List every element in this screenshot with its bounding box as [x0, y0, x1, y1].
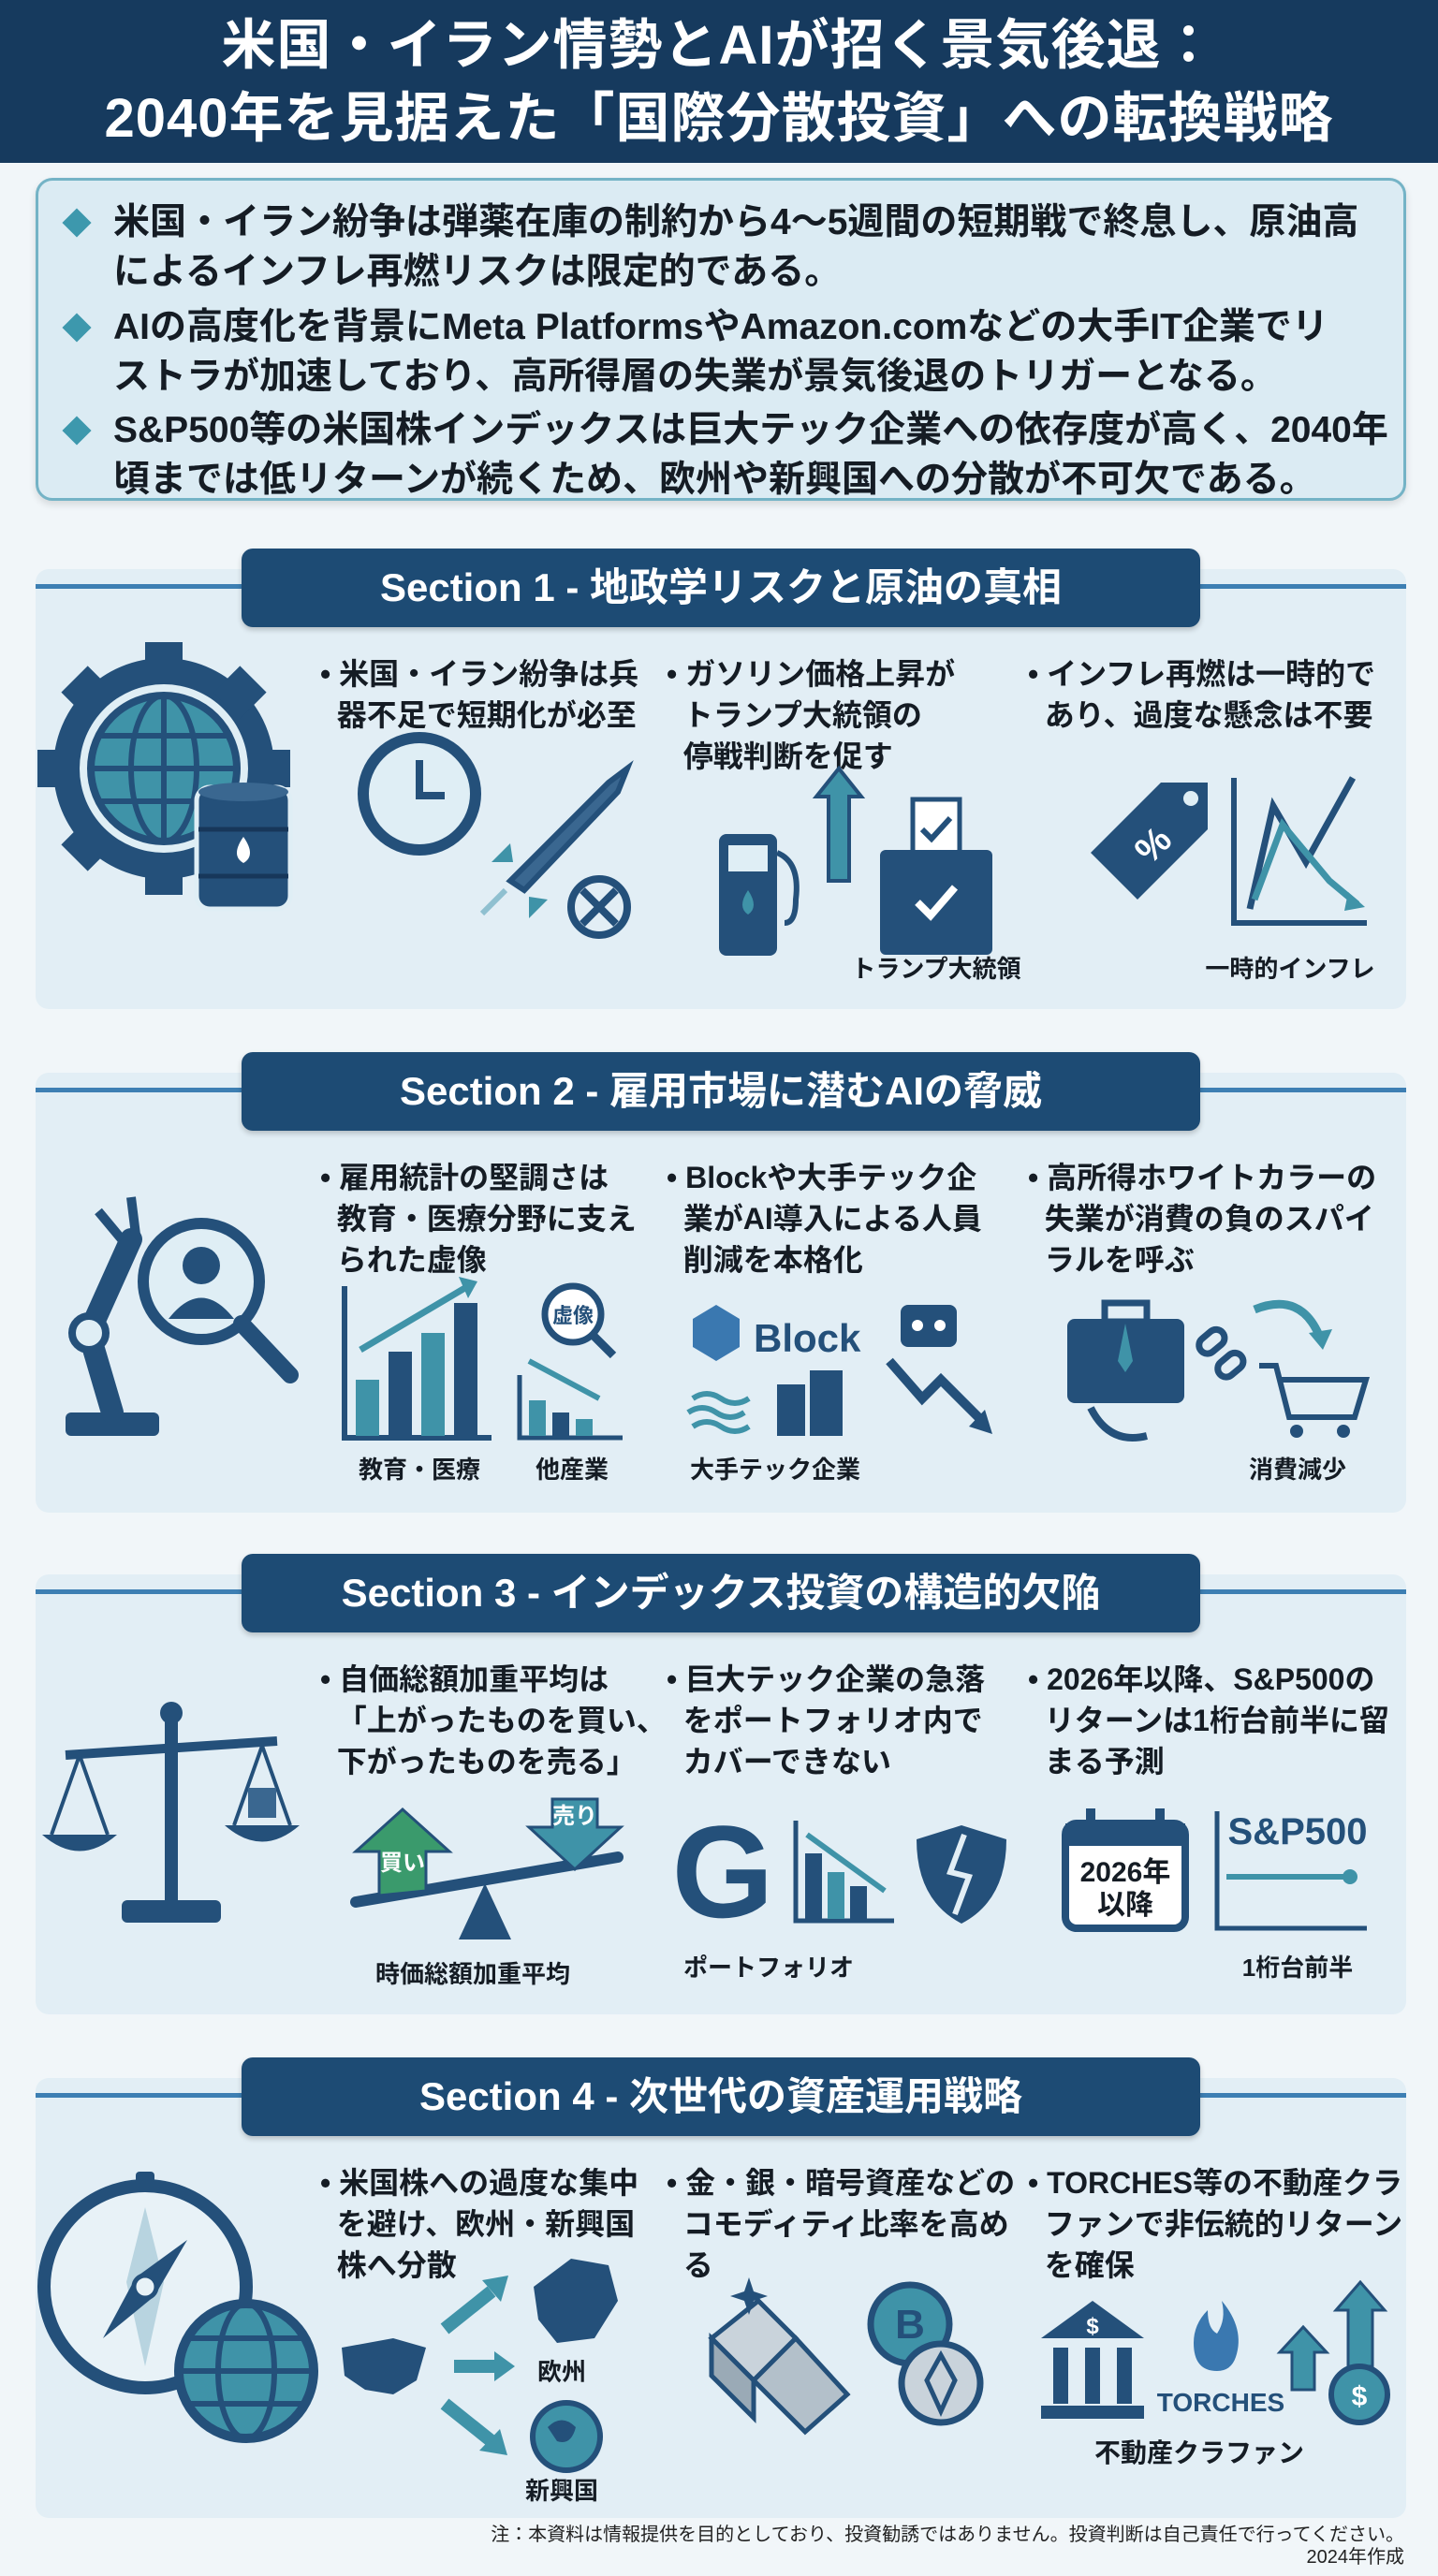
section 3: [36, 1554, 1406, 2014]
s2 bullet 2: • Blockや大手テック企: [667, 1161, 976, 1194]
s4 bullet 2: コモディティ比率を高め: [683, 2207, 1009, 2241]
footer note: [491, 2525, 1404, 2568]
icon: briefcase broken chain cart: [1067, 1303, 1366, 1484]
chart: employment bars: 教育・医療: [359, 1456, 480, 1484]
summary point 2: ストラが加速しており、高所得層の失業が景気後退のトリガーとなる。: [113, 357, 1277, 397]
s1 bullet 1: • 米国・イラン紛争は兵: [320, 657, 638, 691]
section 4 heading: Section 4 - 次世代の資産運用戦略: [419, 2074, 1022, 2118]
s3 bullet 2: をポートフォリオ内で: [683, 1704, 983, 1737]
icon: Block logo, tech firms, robot: 大手テック企業: [690, 1456, 860, 1484]
s3 bullet 2: カバーできない: [683, 1745, 891, 1778]
title header: 2040年を見据えた「国際分散投資」への転換戦略: [104, 88, 1334, 149]
s3 bullet 1: [320, 1662, 667, 1778]
s4 bullet 3: を確保: [1045, 2248, 1135, 2282]
chart: employment bars: 虚像: [552, 1304, 594, 1327]
s3 bullet 3: リターンは1桁台前半に留: [1045, 1704, 1389, 1737]
summary point 2: AIの高度化を背景にMeta PlatformsやAmazon.comなどの大手IT企業でリ: [113, 307, 1328, 347]
icon: seesaw buy sell: 時価総額加重平均: [375, 1960, 570, 1988]
s3 bullet 1: 「上がったものを買い、: [337, 1704, 667, 1737]
section 2: [36, 1052, 1406, 1513]
icon: seesaw buy sell: 買い: [380, 1851, 425, 1876]
s4 bullet 1: 株へ分散: [337, 2248, 457, 2282]
icon: price tag and inflation chart: %: [1127, 819, 1180, 871]
icon: calendar and S&P500 chart: 2026年: [1080, 1857, 1170, 1888]
icon: briefcase broken chain cart: 消費減少: [1249, 1456, 1346, 1484]
s3 bullet 3: [1028, 1662, 1389, 1778]
icon: calendar and S&P500 chart: 以降: [1097, 1890, 1153, 1921]
icon: Block logo, tech firms, robot: [688, 1305, 992, 1484]
icon: calendar and S&P500 chart: [1065, 1808, 1367, 1982]
icon: compass and globe: [44, 2172, 314, 2438]
s3 bullet 2: [667, 1662, 985, 1778]
s3 bullet 1: • 自価総額加重平均は: [320, 1662, 609, 1696]
icon: bank TORCHES arrows: 不動産クラファン: [1094, 2438, 1304, 2467]
section 1 heading: Section 1 - 地政学リスクと原油の真相: [380, 565, 1062, 609]
s4 bullet 1: を避け、欧州・新興国: [337, 2207, 635, 2241]
s4 bullet 3: [1028, 2166, 1402, 2282]
icon: bank TORCHES arrows: TORCHES: [1157, 2388, 1284, 2417]
icon: gas pump arrow ballot: [719, 768, 1021, 983]
s2 bullet 1: • 雇用統計の堅調さは: [320, 1161, 609, 1194]
icon: US map to Europe and emerging markets: [342, 2259, 618, 2505]
icon: clock rocket cancel: [363, 738, 627, 935]
icon: gear globe and oil barrel: [37, 642, 290, 909]
icon: calendar and S&P500 chart: 1桁台前半: [1242, 1954, 1353, 1982]
icon: seesaw buy sell: [356, 1799, 621, 1988]
s2 bullet 1: 教育・医療分野に支え: [337, 1202, 637, 1236]
icon: US map to Europe and emerging markets: 新興国: [525, 2477, 598, 2505]
s4 bullet 1: [320, 2166, 638, 2282]
section 3 heading: Section 3 - インデックス投資の構造的欠陥: [342, 1571, 1100, 1615]
title header: [0, 0, 1438, 163]
icon: portfolio G logo chart shield: ポートフォリオ: [683, 1954, 854, 1982]
section 3 heading: [242, 1554, 1200, 1632]
s1 bullet 3: • インフレ再燃は一時的で: [1028, 657, 1375, 691]
s1 bullet 1: [320, 657, 638, 732]
s2 bullet 3: 失業が消費の負のスパイ: [1045, 1202, 1374, 1236]
icon: gold bars and crypto coins: B: [895, 2302, 925, 2348]
s4 bullet 2: [667, 2166, 1015, 2282]
s1 bullet 3: あり、過度な懸念は不要: [1045, 698, 1373, 732]
section 1 heading: [242, 549, 1200, 627]
s2 bullet 3: • 高所得ホワイトカラーの: [1028, 1161, 1376, 1194]
s4 bullet 1: • 米国株への過度な集中: [320, 2166, 638, 2200]
section 2 heading: Section 2 - 雇用市場に潜むAIの脅威: [400, 1069, 1042, 1113]
icon: gold bars and crypto coins: [712, 2277, 980, 2432]
s4 bullet 3: ファンで非伝統的リターン: [1045, 2207, 1402, 2241]
s2 bullet 3: ラルを呼ぶ: [1045, 1243, 1195, 1277]
s3 bullet 3: まる予測: [1045, 1745, 1165, 1778]
s4 bullet 3: • TORCHES等の不動産クラ: [1028, 2166, 1402, 2200]
section 4: [36, 2057, 1406, 2518]
footer note: 注：本資料は情報提供を目的としており、投資勧誘ではありません。投資判断は自己責任で行ってください。: [491, 2525, 1404, 2545]
s2 bullet 2: 業がAI導入による人員: [683, 1202, 982, 1236]
icon: US map to Europe and emerging markets: 欧州: [537, 2358, 586, 2386]
icon: portfolio G logo chart shield: G: [672, 1798, 773, 1945]
icon: price tag and inflation chart: [1091, 778, 1375, 983]
section 2 heading: [242, 1052, 1200, 1131]
s1 bullet 1: 器不足で短期化が必至: [337, 698, 637, 732]
s1 bullet 2: トランプ大統領の: [683, 698, 922, 732]
s1 bullet 2: [667, 657, 955, 773]
chart: employment bars: [345, 1277, 623, 1484]
icon: calendar and S&P500 chart: S&P500: [1228, 1811, 1367, 1852]
summary point 3: [62, 410, 1388, 500]
section 4 heading: [242, 2057, 1200, 2136]
s2 bullet 3: [1028, 1161, 1376, 1277]
icon: balance scale: [42, 1702, 300, 1923]
s1 bullet 2: • ガソリン価格上昇が: [667, 657, 955, 691]
s1 bullet 2: 停戦判断を促す: [683, 739, 893, 773]
s3 bullet 1: 下がったものを売る」: [337, 1745, 637, 1778]
title header: 米国・イラン情勢とAIが招く景気後退：: [221, 15, 1217, 76]
s4 bullet 2: る: [683, 2248, 713, 2282]
icon: bank TORCHES arrows: $: [1086, 2314, 1099, 2339]
icon: bank TORCHES arrows: [1041, 2282, 1387, 2467]
footer note: 2024年作成: [1307, 2547, 1404, 2568]
icon: bank TORCHES arrows: $: [1352, 2381, 1368, 2412]
summary point 1: [62, 202, 1358, 292]
s2 bullet 2: [667, 1161, 982, 1277]
s3 bullet 2: • 巨大テック企業の急落: [667, 1662, 985, 1696]
summary point 2: [62, 307, 1328, 397]
summary box: [36, 178, 1406, 501]
icon: Block logo, tech firms, robot: Block: [754, 1316, 861, 1360]
s4 bullet 2: • 金・銀・暗号資産などの: [667, 2166, 1015, 2200]
icon: seesaw buy sell: 売り: [552, 1804, 597, 1829]
icon: robot arm with magnifier: [66, 1197, 290, 1436]
icon: portfolio G logo chart shield: [672, 1798, 1006, 1982]
icon: price tag and inflation chart: 一時的インフレ: [1205, 955, 1375, 983]
section 1: [36, 549, 1406, 1009]
s3 bullet 3: • 2026年以降、S&P500の: [1028, 1662, 1374, 1696]
s2 bullet 1: [320, 1161, 637, 1277]
s2 bullet 2: 削減を本格化: [683, 1243, 863, 1277]
s2 bullet 1: られた虚像: [337, 1243, 487, 1277]
chart: employment bars: 他産業: [536, 1456, 609, 1484]
summary point 3: 頃までは低リターンが続くため、欧州や新興国への分散が不可欠である。: [113, 460, 1316, 500]
summary point 1: 米国・イラン紛争は弾薬在庫の制約から4〜5週間の短期戦で終息し、原油高: [113, 202, 1358, 242]
summary point 1: によるインフレ再燃リスクは限定的である。: [113, 252, 841, 292]
summary point 3: S&P500等の米国株インデックスは巨大テック企業への依存度が高く、2040年: [113, 410, 1388, 450]
icon: gas pump arrow ballot: トランプ大統領: [851, 955, 1021, 983]
s1 bullet 3: [1028, 657, 1375, 732]
